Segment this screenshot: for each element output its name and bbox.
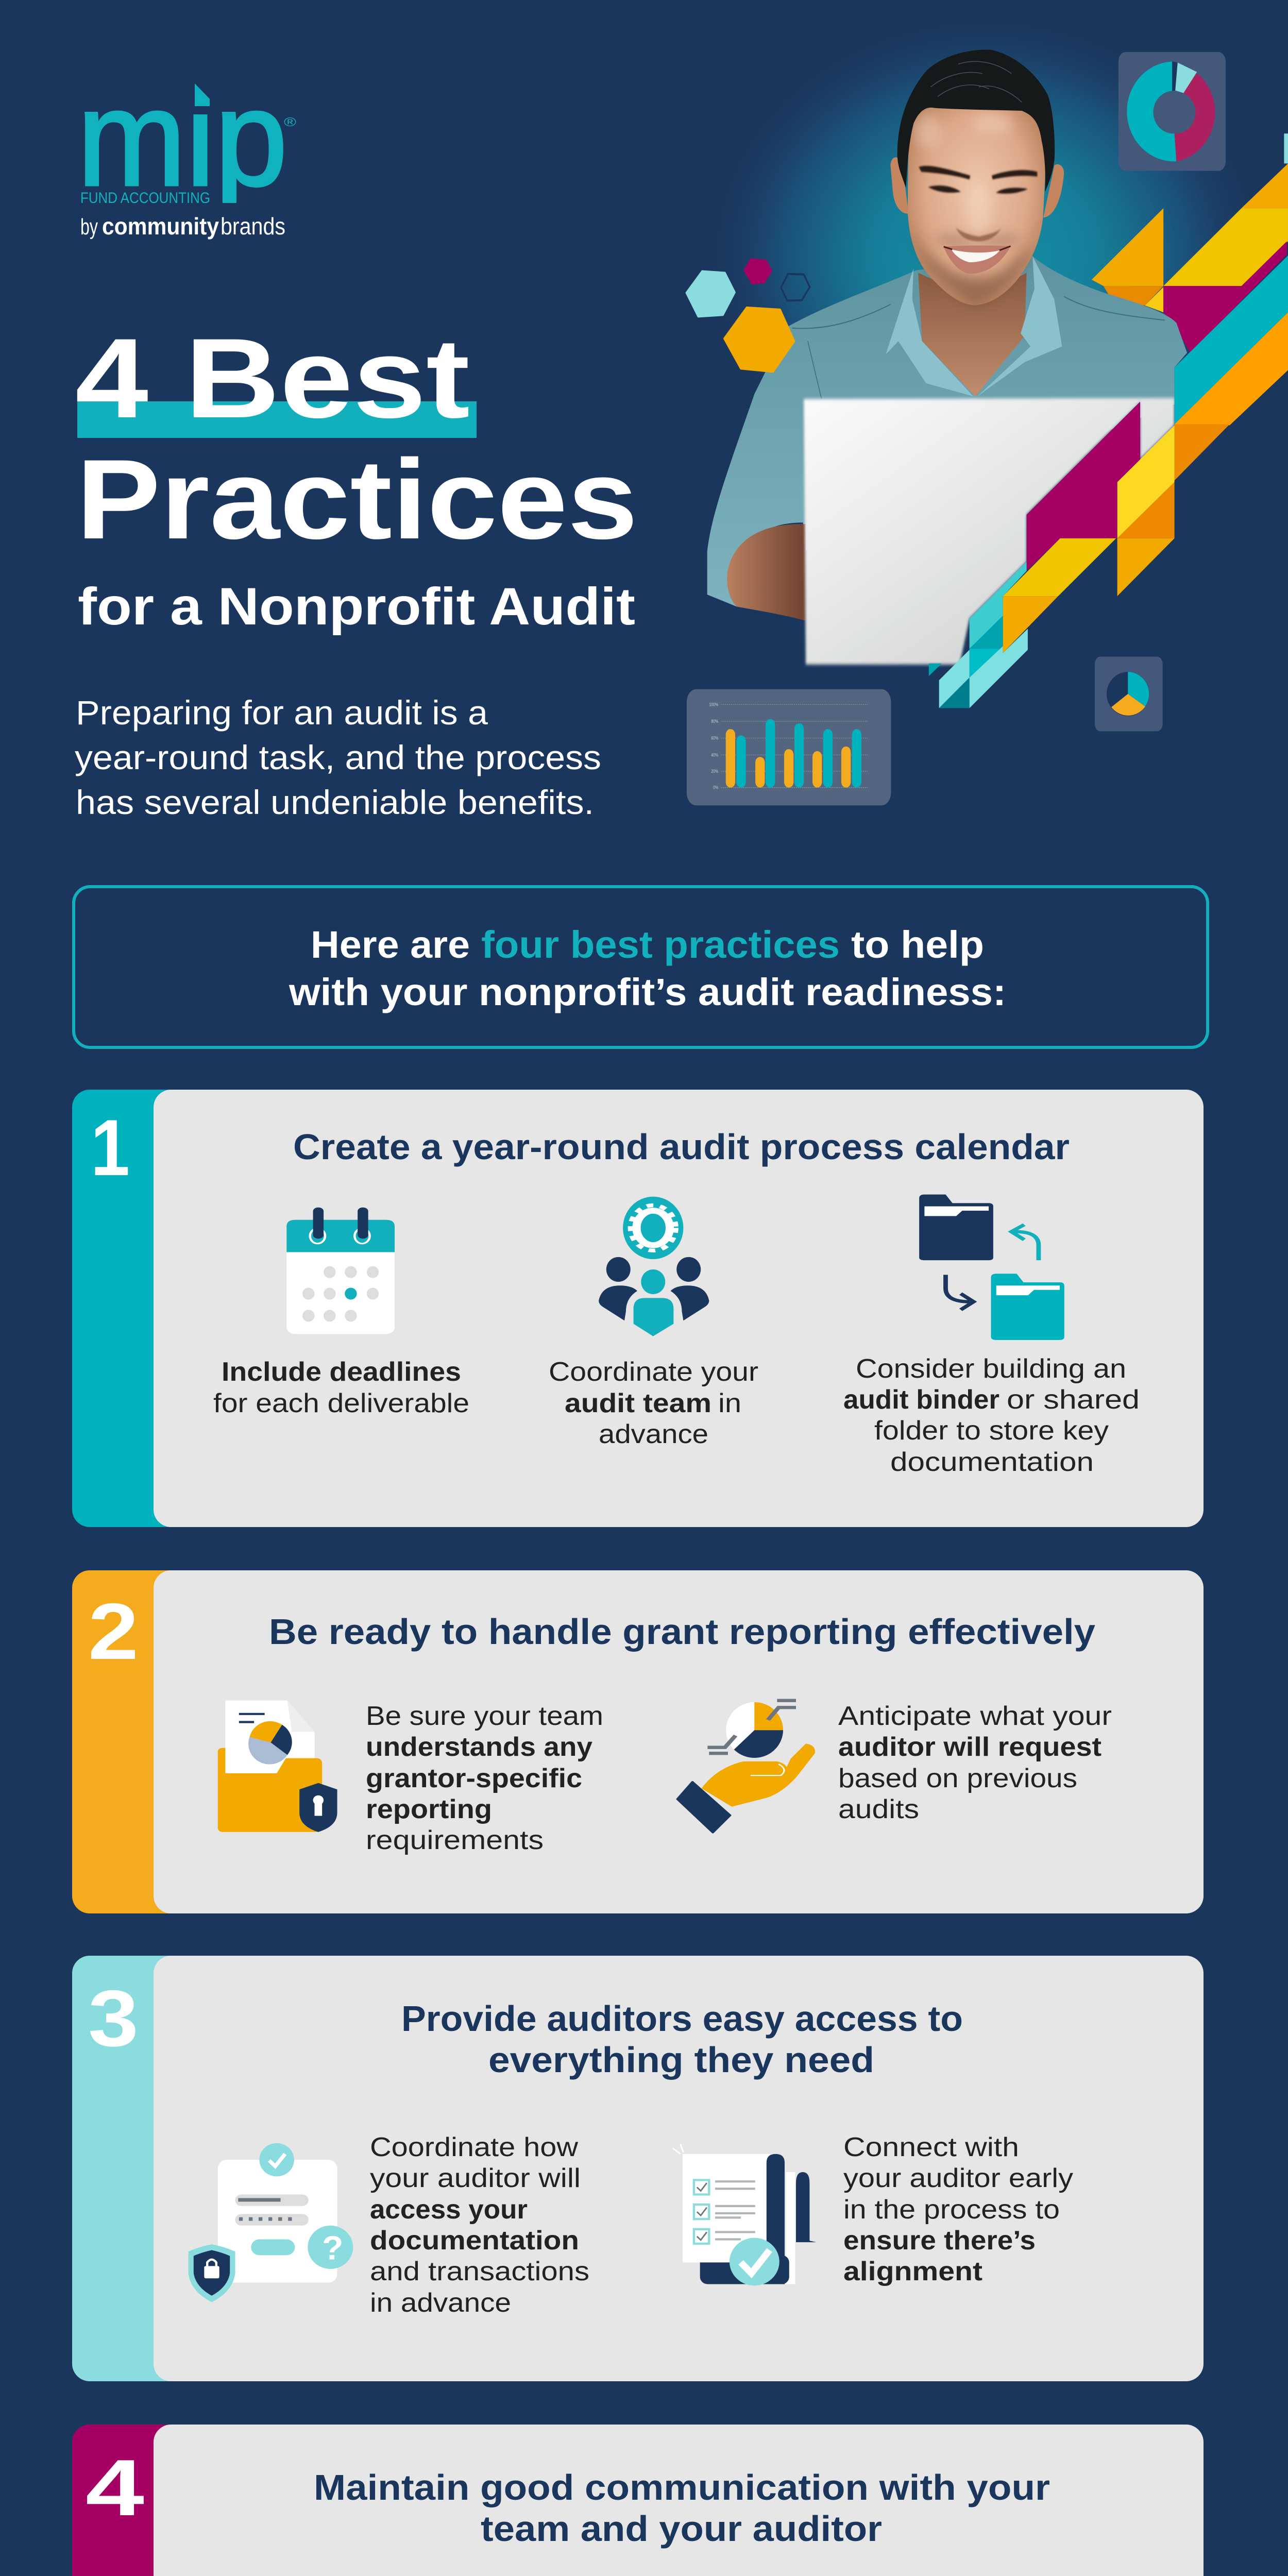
text: grantor-specific requirements: understands any	[366, 1732, 592, 1762]
heading: Be ready to handle grant reporting effectively	[269, 1612, 1095, 1652]
text: include deadlines: Include deadlines	[222, 1357, 461, 1387]
text: access documentation: documentation	[370, 2226, 579, 2256]
text: audit binder: folder to store key	[874, 1416, 1109, 1446]
icon: secure login form: ?	[322, 2229, 343, 2266]
title: for a Nonprofit Audit	[78, 577, 635, 636]
logo: mip fund accounting by community brands: community	[102, 213, 219, 240]
step number 1: 1	[91, 1103, 130, 1192]
stubble	[908, 218, 1042, 305]
intro text: has several undeniable benefits.	[76, 783, 594, 821]
heading	[401, 1998, 963, 2080]
intro text: year-round task, and the process	[75, 738, 601, 776]
hexagon cluster	[686, 258, 810, 371]
laptop	[804, 398, 1175, 665]
text: access documentation: and transactions	[370, 2257, 589, 2286]
ears	[890, 157, 1064, 217]
shirt	[707, 256, 1187, 607]
heading	[314, 2467, 1050, 2549]
callout: intro to best practices	[74, 887, 1208, 1047]
callout: intro to best practices: to help	[851, 923, 984, 966]
text: audit binder: Consider building an	[856, 1354, 1126, 1384]
text: connect early: Connect with	[843, 2132, 1019, 2162]
collar left	[886, 268, 973, 396]
step number 4: 4	[86, 2443, 144, 2532]
text: coordinate audit team: in	[718, 1388, 741, 1418]
text: grantor-specific requirements: reporting	[366, 1794, 492, 1824]
callout: intro to best practices: with your nonprofit’s audit readiness:	[289, 971, 1006, 1013]
text: access documentation	[370, 2132, 589, 2318]
text: anticipate auditor requests: audits	[838, 1794, 919, 1824]
logo: mip fund accounting by community brands: FUND ACCOUNTING	[80, 190, 210, 207]
text: access documentation: in advance	[370, 2288, 511, 2318]
title: Practices	[76, 436, 638, 563]
logo: mip fund accounting by community brands: ®	[284, 115, 296, 129]
text: access documentation: your auditor will	[370, 2163, 581, 2193]
panel: step 3	[72, 1956, 1204, 2381]
shirt seams	[792, 297, 1164, 399]
step number 2: 2	[88, 1587, 139, 1676]
eyebrows	[919, 166, 1037, 179]
heading: team and your auditor	[481, 2509, 882, 2549]
text: audit binder: audit binder	[843, 1385, 999, 1415]
icon: secure login form	[189, 2143, 353, 2302]
icon: audit team with gear	[599, 1197, 709, 1336]
face	[908, 98, 1046, 305]
arm	[727, 524, 806, 621]
text: audit binder: documentation	[890, 1447, 1094, 1477]
text: connect early: ensure there’s	[843, 2226, 1036, 2256]
text: anticipate auditor requests: Anticipate what your	[838, 1701, 1112, 1731]
text: access documentation: access your	[370, 2195, 528, 2225]
eyes	[928, 185, 1028, 194]
text: connect early: in the process to	[843, 2195, 1060, 2225]
text: access documentation: Coordinate how	[370, 2132, 578, 2162]
text: grantor-specific requirements: grantor-specific	[366, 1764, 582, 1793]
head	[890, 49, 1064, 305]
text: coordinate audit team: audit team	[565, 1388, 711, 1418]
text: audit binder	[843, 1354, 1140, 1477]
bar chart card: 80%	[711, 719, 718, 724]
panel: step 2	[72, 1570, 1204, 1913]
logo: mip fund accounting by community brands: mip	[77, 62, 287, 215]
heading: Maintain good communication with your	[314, 2467, 1050, 2507]
bar chart card	[687, 689, 891, 805]
text: connect early: alignment	[843, 2257, 982, 2286]
text: anticipate auditor requests	[838, 1701, 1112, 1824]
heading: everything they need	[488, 2040, 874, 2080]
heading: Provide auditors easy access to	[401, 1998, 963, 2039]
text: grantor-specific requirements: requirements	[366, 1825, 544, 1855]
collar right	[977, 256, 1062, 396]
icon: hand holding pie chart	[677, 1701, 815, 1833]
hair highlights	[931, 61, 1022, 102]
background glow	[701, 10, 1269, 504]
title	[75, 315, 638, 636]
text: anticipate auditor requests: based on previous	[838, 1764, 1077, 1793]
text: include deadlines: for each deliverable	[213, 1388, 469, 1418]
text: anticipate auditor requests: auditor will request	[838, 1732, 1101, 1762]
geometric shapes behind person	[1092, 133, 1288, 353]
callout: intro to best practices: Here are	[311, 923, 470, 966]
bar chart card: 20%	[711, 769, 718, 774]
bar chart card: 0%	[713, 785, 718, 790]
heading: Create a year-round audit process calendar	[293, 1127, 1070, 1167]
text: connect early: your auditor early	[843, 2163, 1073, 2193]
icon: checklist document	[673, 2144, 817, 2285]
intro text	[75, 693, 601, 821]
nose shadow	[956, 227, 1002, 241]
text: include deadlines	[213, 1357, 469, 1418]
text: grantor-specific requirements: Be sure your team	[366, 1701, 603, 1731]
hero illustration	[686, 10, 1288, 805]
panel: step 4	[72, 2425, 1204, 2576]
bar chart card: 60%	[711, 736, 718, 741]
donut chart card	[1118, 52, 1226, 171]
logo: mip fund accounting by community brands: by	[80, 214, 98, 240]
icon: shared folders	[919, 1194, 1064, 1340]
text: grantor-specific requirements	[366, 1701, 603, 1855]
logo: mip fund accounting by community brands: brands	[221, 213, 285, 240]
mouth	[944, 245, 1011, 274]
text: coordinate audit team: Coordinate your	[549, 1357, 758, 1387]
text: audit binder: or shared	[1007, 1385, 1140, 1415]
icon: calendar	[286, 1208, 395, 1334]
bar chart card: 40%	[711, 752, 718, 758]
step number 3: 3	[88, 1974, 139, 2063]
hair	[897, 49, 1055, 192]
bar chart card: 100%	[709, 702, 718, 707]
text: connect early	[843, 2132, 1073, 2286]
text: coordinate audit team	[549, 1357, 758, 1449]
title: 4 Best	[75, 315, 470, 442]
intro text: Preparing for an audit is a	[76, 693, 488, 732]
neck	[918, 273, 1027, 396]
callout: intro to best practices: four best practices	[481, 923, 840, 966]
geometric shapes in front of laptop	[929, 256, 1288, 708]
pie chart card	[1095, 656, 1163, 731]
text: coordinate audit team: advance	[599, 1419, 708, 1449]
panel: step 1	[72, 1090, 1204, 1527]
icon: report folder with shield	[218, 1701, 337, 1832]
skin highlights	[913, 113, 1013, 234]
